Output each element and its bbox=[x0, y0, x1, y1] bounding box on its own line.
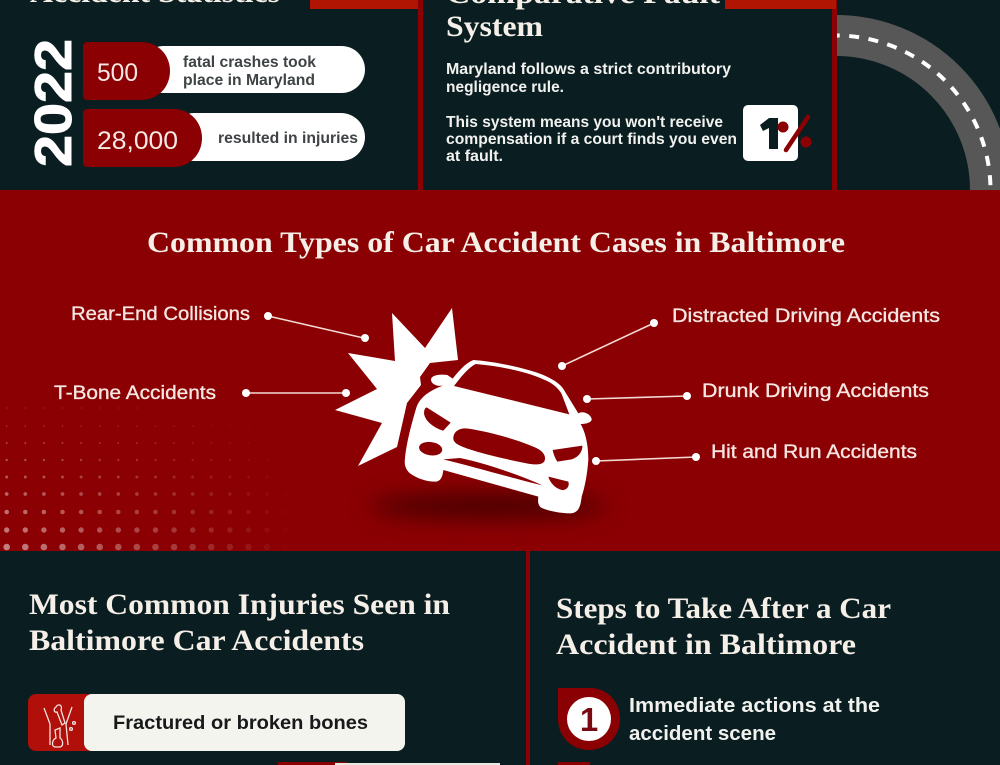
stat: 28,000 injuries bbox=[83, 109, 365, 167]
accent bar bbox=[310, 0, 420, 9]
text: contributory negligence rule: negligence rule. bbox=[446, 79, 564, 96]
heading: steps to take bbox=[556, 592, 891, 661]
panel: accident statistics bbox=[25, 0, 420, 167]
heading: most common injuries bbox=[29, 588, 450, 657]
text: contributory negligence rule bbox=[446, 61, 731, 96]
text: contributory negligence rule: Maryland follows a strict contributory bbox=[446, 61, 731, 78]
step 2 badge (cut off) bbox=[558, 762, 590, 765]
panel: common types of car accident cases bbox=[0, 190, 1000, 551]
heading: comparative fault system: System bbox=[446, 10, 543, 43]
step 1 text bbox=[629, 695, 880, 745]
text: system explanation: This system means you won't receive bbox=[446, 114, 723, 131]
stat: 500 fatal crashes: 500 bbox=[97, 59, 138, 87]
accent bar bbox=[725, 0, 836, 9]
heading: steps to take: Accident in Baltimore bbox=[556, 628, 856, 661]
icon: crashed car bbox=[405, 360, 592, 513]
label: rear-end collisions: Rear-End Collisions bbox=[71, 304, 250, 325]
stat: 28,000 injuries: 28,000 bbox=[97, 127, 178, 155]
label: distracted driving accidents: Distracted Driving Accidents bbox=[672, 306, 940, 327]
step 1 text: accident scene bbox=[629, 723, 776, 745]
step 1 badge bbox=[558, 688, 620, 750]
heading: comparative fault system bbox=[446, 0, 720, 43]
injury item: fractured or broken bones: Fractured or broken bones bbox=[113, 713, 368, 734]
label: hit and run accidents: Hit and Run Accidents bbox=[711, 442, 917, 463]
label: t-bone accidents bbox=[54, 383, 350, 404]
label: drunk driving accidents: Drunk Driving Accidents bbox=[702, 381, 929, 402]
text: system explanation bbox=[446, 114, 737, 165]
halftone dot pattern bbox=[7, 408, 295, 547]
icon: broken bone bbox=[44, 705, 75, 747]
divider bbox=[526, 551, 530, 765]
stat: 500 fatal crashes bbox=[83, 42, 365, 100]
label: hit and run accidents bbox=[592, 442, 917, 465]
label: t-bone accidents: T-Bone Accidents bbox=[54, 383, 216, 404]
text: system explanation: compensation if a court finds you even bbox=[446, 131, 737, 148]
heading: steps to take: Steps to Take After a Car bbox=[556, 592, 891, 625]
heading: common types: Common Types of Car Accident Cases in Baltimore bbox=[147, 226, 845, 259]
label: rear-end collisions bbox=[71, 304, 369, 342]
label: distracted driving accidents bbox=[558, 306, 940, 370]
injury item: next row (cut off) bbox=[278, 762, 500, 765]
label: drunk driving accidents bbox=[583, 381, 929, 403]
panel: most common injuries bbox=[28, 588, 500, 765]
icon: 1 percent card bbox=[743, 105, 812, 161]
step 1 text: Immediate actions at the bbox=[629, 695, 880, 717]
year label 2022: 2022 bbox=[25, 39, 83, 167]
panel: comparative fault system bbox=[418, 0, 837, 190]
heading: most common injuries: Most Common Injuries Seen in bbox=[29, 588, 450, 621]
stat: 28,000 injuries: resulted in injuries bbox=[218, 130, 358, 147]
stat: 500 fatal crashes: place in Maryland bbox=[183, 72, 315, 89]
step 1 badge: 1 bbox=[580, 701, 598, 738]
stat: 500 fatal crashes: fatal crashes took bbox=[183, 54, 316, 71]
injury item: fractured or broken bones bbox=[28, 694, 405, 751]
text: system explanation: at fault. bbox=[446, 148, 503, 165]
heading: most common injuries: Baltimore Car Accidents bbox=[29, 624, 364, 657]
panel: steps after a car accident bbox=[556, 592, 891, 765]
road illustration bbox=[837, 15, 1000, 190]
car shadow bbox=[370, 493, 606, 519]
icon: crash starburst bbox=[335, 308, 458, 466]
